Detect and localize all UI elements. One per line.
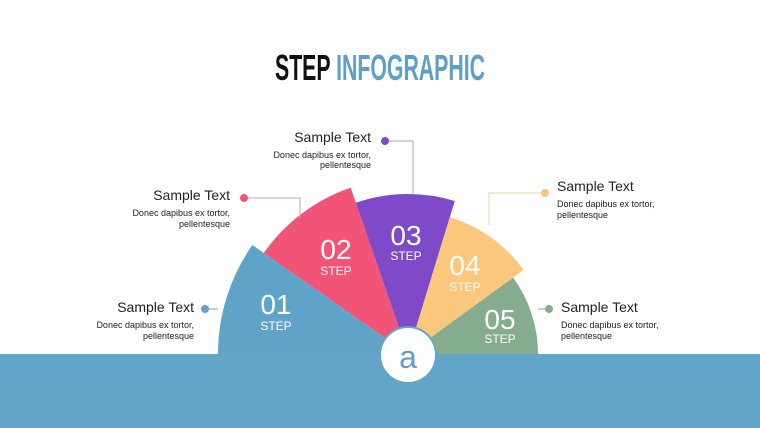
text block 4 bbox=[557, 178, 655, 220]
step labels: 02 bbox=[320, 234, 352, 265]
dots bbox=[201, 137, 553, 313]
center circle icon bbox=[380, 327, 436, 383]
text block 1: Donec dapibus ex tortor, bbox=[96, 320, 194, 330]
text block 5: Donec dapibus ex tortor, bbox=[561, 320, 659, 330]
base bar bbox=[0, 354, 760, 428]
step labels: STEP bbox=[449, 280, 481, 294]
sector 03 bbox=[356, 194, 455, 354]
text block 4: Sample Text bbox=[557, 178, 634, 194]
text block 3: Sample Text bbox=[294, 129, 371, 145]
connectors bbox=[205, 141, 549, 309]
step labels: 05 bbox=[484, 304, 516, 335]
text block 1: Sample Text bbox=[117, 299, 194, 315]
step labels: 01 bbox=[260, 289, 292, 320]
text block 3 bbox=[273, 129, 371, 170]
step labels: STEP bbox=[260, 319, 292, 333]
center circle icon: a bbox=[399, 339, 417, 375]
title: STEP INFOGRAPHIC bbox=[275, 47, 485, 88]
text block 2: Sample Text bbox=[153, 187, 230, 203]
text block 1: pellentesque bbox=[143, 331, 194, 341]
text block 3: pellentesque bbox=[320, 160, 371, 170]
text block 4: pellentesque bbox=[557, 210, 608, 220]
step labels: 03 bbox=[390, 220, 422, 251]
step labels: STEP bbox=[484, 332, 516, 346]
text block 2: pellentesque bbox=[179, 219, 230, 229]
text block 3: Donec dapibus ex tortor, bbox=[273, 150, 371, 160]
text block 4: Donec dapibus ex tortor, bbox=[557, 199, 655, 209]
step labels: STEP bbox=[390, 249, 422, 263]
sector 01 bbox=[218, 245, 408, 354]
text block 5: Sample Text bbox=[561, 299, 638, 315]
text block 2 bbox=[132, 187, 230, 229]
semicircle chart bbox=[218, 188, 538, 354]
text block 2: Donec dapibus ex tortor, bbox=[132, 208, 230, 218]
text block 5: pellentesque bbox=[561, 331, 612, 341]
sector 04 bbox=[408, 217, 524, 354]
text block 5 bbox=[561, 299, 659, 341]
step labels: 04 bbox=[449, 250, 481, 281]
step labels: STEP bbox=[320, 264, 352, 278]
step labels bbox=[260, 220, 516, 346]
sector 05 bbox=[408, 278, 538, 354]
text block 1 bbox=[96, 299, 194, 341]
sector 02 bbox=[264, 188, 408, 354]
